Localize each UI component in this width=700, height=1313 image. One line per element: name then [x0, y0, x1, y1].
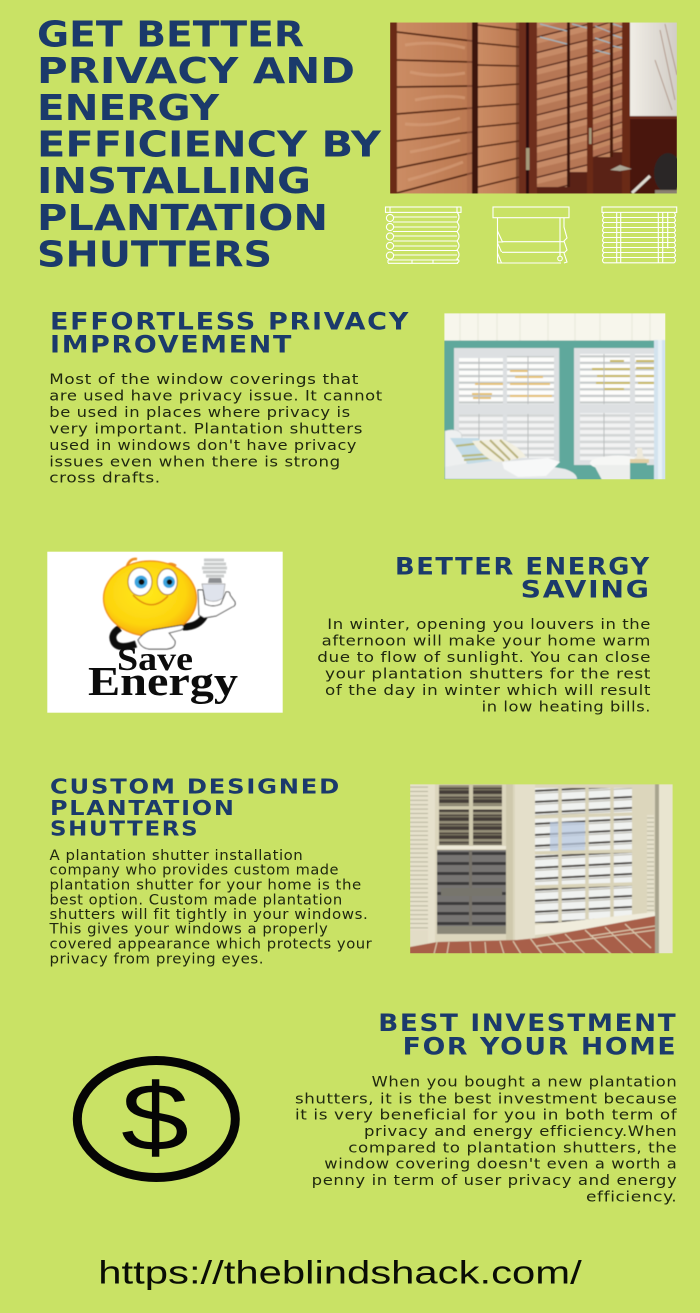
body text: privacy: cross drafts. [49, 471, 161, 487]
heading: best investment: FOR YOUR HOME [403, 1032, 677, 1060]
icon: venetian blind [602, 207, 677, 263]
title: INSTALLING [37, 161, 311, 202]
panel: best investment for your home [295, 1009, 678, 1205]
icon: pointing glove [138, 625, 184, 649]
body text: investment: window covering doesn't even a worth a [324, 1157, 677, 1173]
heading: effortless privacy: EFFORTLESS PRIVACY [50, 308, 410, 336]
title: PLANTATION [37, 198, 328, 239]
icon: dollar sign in circle [77, 1060, 235, 1178]
body text: custom: plantation shutter for your home is the [50, 878, 362, 894]
photo: save energy cartoon [47, 552, 283, 713]
text: save energy [88, 641, 239, 704]
body text: custom: privacy from preying eyes. [50, 951, 264, 967]
website url: https://theblindshack.com/ [98, 1254, 582, 1290]
body text: energy: due to flow of sunlight. You can close [317, 650, 651, 666]
body text: privacy [49, 372, 383, 487]
heading: custom designed: CUSTOM DESIGNED [50, 774, 341, 798]
text: save energy: Save [117, 641, 193, 678]
title: SHUTTERS [37, 235, 272, 276]
title: GET BETTER [37, 15, 304, 56]
body text: energy: afternoon will make your home warm [322, 634, 651, 650]
title: EFFICIENCY BY [37, 125, 382, 166]
heading: best investment: BEST INVESTMENT [378, 1009, 677, 1037]
body text: privacy: issues even when there is strong [49, 454, 341, 470]
body text: custom: covered appearance which protects your [50, 936, 372, 952]
heading: effortless privacy: IMPROVEMENT [50, 331, 293, 359]
body text: investment: it is very beneficial for you in both term of [295, 1108, 678, 1124]
photo: window with white shutters [410, 784, 673, 954]
heading: custom designed: SHUTTERS [50, 817, 199, 841]
title [37, 15, 382, 276]
heading: better energy saving [395, 552, 651, 604]
body text: investment [295, 1075, 678, 1205]
icon: smiling face [104, 559, 196, 636]
body text: energy [317, 617, 651, 715]
body text: custom [48, 848, 372, 967]
text: save energy: Energy [88, 658, 239, 704]
body text: energy: your plantation shutters for the rest [325, 666, 651, 682]
icon: cellular blind [386, 207, 461, 263]
body text: privacy: Most of the window coverings that [49, 372, 359, 388]
heading: custom designed [50, 774, 341, 841]
panel: better energy saving [317, 552, 651, 715]
body text: energy: of the day in winter which will result [325, 683, 651, 699]
photo: wooden plantation shutters [390, 22, 682, 194]
body text: investment: When you bought a new plantation [372, 1075, 677, 1091]
body text: investment: compared to plantation shutters, the [348, 1140, 677, 1156]
panel: effortless privacy improvement [49, 308, 410, 487]
body text: energy: In winter, opening you louvers in the [327, 617, 651, 633]
body text: custom: This gives your windows a properly [48, 922, 328, 938]
icon: energy saving bulb and hand [198, 560, 235, 618]
body text: energy: in low heating bills. [482, 699, 651, 715]
icon: roman shade [493, 207, 569, 263]
photo: white shutters on teal wall [444, 313, 666, 480]
heading: effortless privacy [50, 308, 410, 359]
body text: custom: best option. Custom made plantation [50, 892, 343, 908]
body text: privacy: used in windows don't have privacy [49, 438, 357, 454]
body text: custom: A plantation shutter installation [50, 848, 303, 864]
icon: arms [113, 615, 205, 647]
heading: better energy saving: SAVING [521, 576, 651, 604]
body text: privacy: very important. Plantation shutters [49, 421, 363, 437]
body text: privacy: are used have privacy issue. It cannot [49, 389, 383, 405]
body text: custom: shutters will fit tightly in your windows. [50, 907, 368, 923]
heading: best investment [378, 1009, 677, 1060]
body text: privacy: be used in places where privacy is [49, 405, 351, 421]
body text: investment: privacy and energy efficiency.When [364, 1124, 677, 1140]
title: PRIVACY AND [37, 51, 355, 92]
heading: better energy saving: BETTER ENERGY [395, 552, 651, 580]
body text: custom: company who provides custom made [50, 863, 339, 879]
body text: investment: penny in term of user privacy and energy [312, 1173, 677, 1189]
icon: dollar sign in circle: $ [121, 1064, 189, 1171]
body text: investment: shutters, it is the best investment because [295, 1091, 677, 1107]
body text: investment: efficiency. [586, 1189, 677, 1205]
panel: custom designed plantation shutters [48, 774, 372, 967]
heading: custom designed: PLANTATION [50, 796, 236, 820]
title: ENERGY [37, 88, 220, 129]
